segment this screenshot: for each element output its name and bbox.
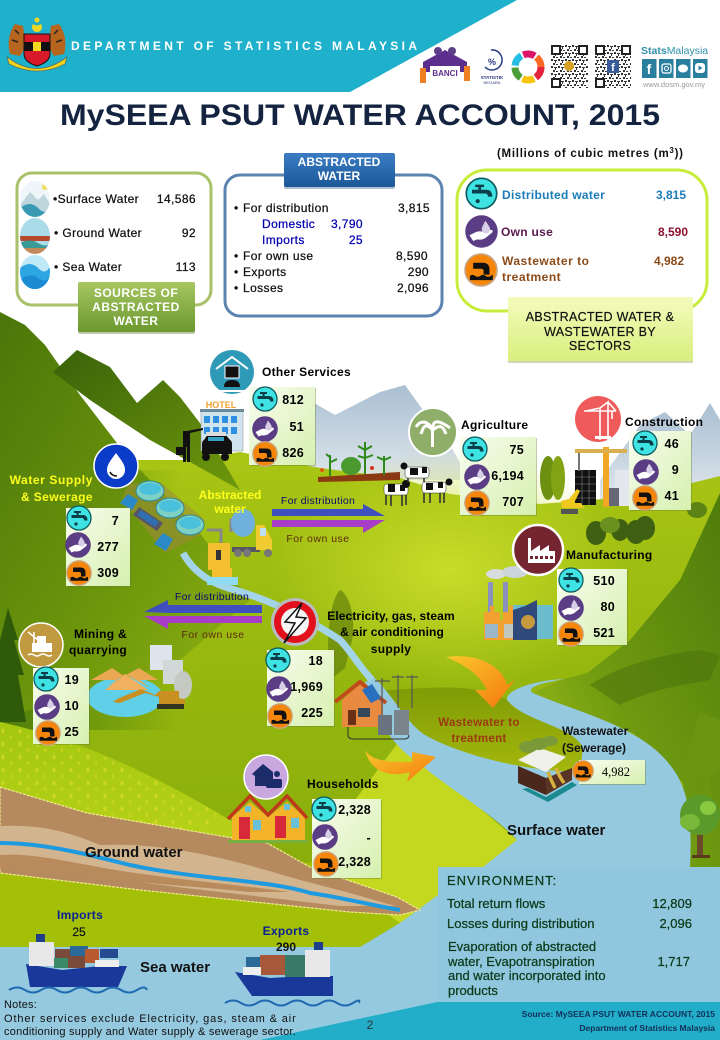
source: Source: MySEEA PSUT WATER ACCOUNT, 2015: [522, 1009, 715, 1019]
label: imports: 25: [72, 925, 86, 939]
data card: agriculture: 707: [502, 495, 524, 509]
data card: construction: 46: [664, 437, 679, 451]
units note: )): [675, 148, 683, 160]
label: imports: [57, 908, 103, 939]
arrows: for distribution and own use (left): For distribution: [175, 591, 249, 603]
sector title: mining and quarrying: quarrying: [69, 643, 127, 657]
panel: abstracted water: [225, 175, 442, 316]
rows: •Surface Water: [53, 192, 139, 206]
panel: abstracted water: 8,590: [396, 249, 428, 263]
panel: abstracted water: 3,815: [398, 201, 430, 215]
panel: environment: Total return flows: [447, 896, 546, 911]
panel: environment: 2,096: [659, 916, 692, 931]
sector title: mining and quarrying: Mining &: [74, 627, 127, 641]
panel: abstracted water: Domestic: [262, 217, 315, 231]
sector title: construction: Construction: [625, 415, 703, 429]
panel: abstracted water: 3,790: [331, 217, 363, 231]
panel: abstracted water: Exports: [243, 265, 286, 279]
data card: electricity: 18: [308, 654, 323, 668]
data card: mining and quarrying: 19: [64, 673, 79, 687]
arrow: wastewater curve lower: [365, 750, 436, 782]
sector title: manufacturing: Manufacturing: [566, 548, 653, 562]
panel: environment: 12,809: [652, 896, 692, 911]
logo: statistik negara: %: [488, 57, 496, 67]
panel: environment: and water incorporated into: [448, 968, 606, 983]
data card: water supply and sewerage: 309: [97, 566, 119, 580]
data card: manufacturing: 521: [593, 626, 615, 640]
data card: water supply and sewerage: 277: [97, 540, 119, 554]
panel: abstracted water: 290: [408, 265, 429, 279]
arrows: for distribution and own use (right): [272, 495, 385, 545]
label: abstracted water: [284, 153, 395, 189]
illustration: water treatment plant: [120, 481, 205, 553]
illustration: tree: [680, 795, 720, 858]
river and sea: [0, 553, 720, 1040]
illustration: wastewater treatment plant: [518, 736, 577, 802]
panel: abstracted water: •: [234, 281, 239, 295]
panel: abstracted water and wastewater by sectors: 3,815: [656, 188, 686, 202]
data card: other services: 51: [289, 420, 304, 434]
label: abstracted water and wastewater by sectors: [508, 297, 693, 363]
units note: 3: [669, 146, 674, 155]
data card: other services: 812: [282, 393, 304, 407]
notes: Notes:: [4, 999, 37, 1011]
illustration: hotel and taxi: [176, 400, 244, 462]
source: Department of Statistics Malaysia: [579, 1023, 715, 1033]
label: abstracted water: [199, 488, 261, 516]
label: exports: [263, 924, 309, 954]
sector icon: households: [244, 755, 288, 799]
notes: conditioning supply and Water supply & sewerage sector.: [4, 1026, 296, 1038]
data card: wastewater sewerage: [573, 760, 646, 785]
data card: manufacturing: [557, 568, 628, 646]
sector title: mining and quarrying: [69, 627, 127, 657]
label: exports: 290: [276, 940, 296, 954]
panel: abstracted water and wastewater by sectors: 4,982: [654, 254, 684, 268]
data card: households: 2,328: [338, 855, 371, 869]
panel: abstracted water: •: [234, 265, 239, 279]
illustration: hotel and taxi: HOTEL: [206, 400, 237, 410]
label: sources of abstracted water: SOURCES OF: [94, 286, 178, 300]
panel: abstracted water and wastewater by sectors: Distributed water: [502, 188, 605, 202]
sector title: electricity: & air conditioning: [340, 625, 444, 639]
trees and distant vegetation: [0, 456, 720, 800]
label: abstracted water and wastewater by sectors: ABSTRACTED WATER &: [526, 310, 675, 324]
sector title: water supply and sewerage: & Sewerage: [21, 490, 93, 504]
label: sea water: Sea water: [140, 959, 210, 976]
icon: wastewater: [465, 254, 497, 286]
illustration: pump and tanker truck: [207, 509, 272, 585]
StatsMalaysia social block: f: [647, 61, 652, 77]
logo: statistik negara: STATISTIK: [481, 75, 504, 80]
QR code: facebook: f: [611, 62, 615, 74]
rows: 113: [176, 260, 196, 274]
data card: manufacturing: 510: [593, 574, 615, 588]
sector icon: manufacturing: [513, 525, 563, 575]
data card: manufacturing: 80: [600, 600, 615, 614]
sector title: water supply and sewerage: Water Supply: [10, 473, 93, 487]
illustration: crops: [318, 442, 400, 482]
label: sources of abstracted water: ABSTRACTED: [92, 300, 180, 314]
panel: abstracted water and wastewater by sectors: Wastewater to: [502, 254, 589, 268]
illustration: cows: [384, 462, 452, 506]
label: abstracted water: ABSTRACTED: [298, 155, 381, 169]
rows: 92: [182, 226, 196, 240]
panel: environment: products: [448, 983, 498, 998]
arrows: for distribution and own use (left): [144, 591, 262, 641]
sector icon: water supply: [94, 444, 138, 488]
icon: surface water: [20, 181, 50, 217]
arrows: for distribution and own use (right): For own use: [286, 533, 350, 545]
waves: exports: [225, 1000, 359, 1006]
label: wastewater to treatment: treatment: [451, 733, 507, 745]
data card: construction: 9: [672, 463, 679, 477]
panel: environment: Losses during distribution: [447, 916, 594, 931]
illustration: construction site: [561, 447, 631, 514]
title: MySEEA PSUT WATER ACCOUNT, 2015: [60, 99, 660, 132]
rows: 14,586: [157, 192, 196, 206]
panel: environment: 1,717: [657, 954, 690, 969]
source: [522, 1009, 715, 1033]
panel: environment: water, Evapotranspiration: [447, 954, 595, 969]
label: wastewater sewerage: (Sewerage): [562, 741, 626, 755]
department name: DEPARTMENT OF STATISTICS MALAYSIA: [71, 39, 417, 53]
sector icon: agriculture: [409, 408, 457, 456]
ship: exports: [235, 942, 333, 996]
label: sources of abstracted water: [78, 282, 195, 334]
label: abstracted water and wastewater by sectors: WASTEWATER BY: [544, 325, 656, 339]
label: wastewater sewerage: Wastewater: [562, 724, 629, 738]
data card: agriculture: 75: [509, 443, 524, 457]
panel: abstracted water and wastewater by sectors: treatment: [502, 270, 561, 284]
label: abstracted water: water: [213, 502, 246, 516]
logo: statistik negara: NEGARA: [484, 80, 501, 85]
panel: abstracted water: •: [234, 201, 239, 215]
rows: • Sea Water: [54, 260, 122, 274]
data card: households: 2,328: [338, 803, 371, 817]
panel: abstracted water: For own use: [243, 249, 313, 263]
sector title: electricity: [327, 609, 455, 656]
page number: 2: [367, 1018, 374, 1032]
label: abstracted water and wastewater by sectors: SECTORS: [569, 339, 631, 353]
panel: environment: [438, 867, 720, 1002]
notes: [4, 999, 296, 1038]
units note: (Millions of cubic metres (m: [497, 148, 669, 160]
StatsMalaysia social block: [641, 45, 708, 89]
arrows: for distribution and own use (right): For distribution: [281, 495, 355, 507]
sector icon: construction: [575, 396, 621, 442]
arrow: wastewater curve upper: [446, 656, 515, 708]
notes: Other services exclude Electricity, gas, steam & air: [4, 1013, 296, 1025]
data card: electricity: 225: [301, 706, 323, 720]
label: sources of abstracted water: WATER: [114, 314, 158, 328]
StatsMalaysia social block: StatsMalaysia: [641, 45, 708, 57]
bottom footer band: [260, 1002, 720, 1040]
logo: SDG wheel: [515, 54, 541, 80]
data card: construction: 41: [664, 489, 679, 503]
data card: wastewater sewerage: 4,982: [602, 765, 630, 779]
sector title: water supply and sewerage: [10, 473, 93, 504]
panel: sources of abstracted water: [17, 173, 211, 305]
data card: agriculture: 6,194: [491, 469, 524, 483]
icon: distributed water: [466, 178, 497, 209]
sector icon: other services: [210, 350, 254, 394]
panel: abstracted water: 25: [349, 233, 363, 247]
panel: abstracted water: Imports: [262, 233, 305, 247]
icon: own use: [465, 215, 498, 248]
sector icon: mining: [19, 623, 63, 667]
sector icon: electricity: [271, 598, 319, 646]
illustration: two houses: [228, 796, 308, 843]
logo: banci: BANCI: [432, 69, 458, 78]
QR code: website: [551, 45, 588, 88]
label: abstracted water: WATER: [318, 169, 361, 183]
sector title: electricity: Electricity, gas, steam: [327, 609, 455, 623]
icon: sea water: [20, 255, 50, 289]
StatsMalaysia social block: www.dosm.gov.my: [642, 80, 705, 89]
panel: abstracted water: •: [234, 249, 239, 263]
data card: households: [312, 797, 382, 879]
label: ground water: Ground water: [85, 844, 183, 861]
sector title: agriculture: Agriculture: [461, 418, 528, 432]
data card: other services: 826: [282, 446, 304, 460]
illustration: sand and excavator: [87, 645, 192, 717]
label: surface water: Surface water: [507, 822, 606, 839]
waves: imports: [9, 988, 147, 992]
illustration: house with solar panels: [335, 675, 418, 739]
arrows: for distribution and own use (left): For own use: [181, 629, 245, 641]
data card: households: -: [367, 831, 371, 845]
data card: mining and quarrying: [33, 667, 90, 745]
panel: abstracted water: For distribution: [243, 201, 329, 215]
ground water strata: [0, 787, 420, 915]
panel: abstracted water and wastewater by sectors: [457, 170, 707, 311]
sector title: electricity: supply: [371, 642, 411, 656]
logo: statistik negara: [481, 50, 504, 85]
data card: construction: [629, 431, 692, 511]
data card: water supply and sewerage: [65, 506, 131, 587]
rows: • Ground Water: [54, 226, 142, 240]
panel: environment: Evaporation of abstracted: [448, 939, 596, 954]
sector title: other services: Other Services: [262, 365, 351, 379]
label: wastewater sewerage: [562, 724, 629, 755]
illustration: factory: [484, 566, 553, 640]
label: wastewater to treatment: Wastewater to: [438, 717, 520, 729]
emblem: coat of arms: [7, 18, 67, 71]
header band: [0, 0, 517, 92]
data card: mining and quarrying: 25: [64, 725, 79, 739]
data card: electricity: [266, 648, 335, 728]
QR code: facebook: [595, 45, 631, 88]
panel: abstracted water: 2,096: [397, 281, 429, 295]
data card: agriculture: [460, 437, 537, 516]
sector title: households: Households: [307, 777, 379, 791]
label: wastewater to treatment: [438, 717, 520, 745]
data card: mining and quarrying: 10: [64, 699, 79, 713]
data card: other services: [249, 387, 316, 466]
label: abstracted water: Abstracted: [199, 488, 261, 502]
panel: environment: ENVIRONMENT:: [447, 873, 557, 888]
label: exports: Exports: [263, 924, 309, 938]
icon: ground water: [20, 218, 50, 256]
panel: abstracted water: Losses: [243, 281, 283, 295]
ship: imports: [26, 934, 127, 987]
rows: [53, 192, 196, 274]
data card: water supply and sewerage: 7: [112, 514, 119, 528]
logo: banci: [420, 47, 470, 83]
panel: abstracted water and wastewater by sectors: Own use: [501, 225, 553, 239]
panel: abstracted water and wastewater by sectors: 8,590: [658, 225, 688, 239]
data card: electricity: 1,969: [290, 680, 323, 694]
label: imports: Imports: [57, 908, 103, 922]
